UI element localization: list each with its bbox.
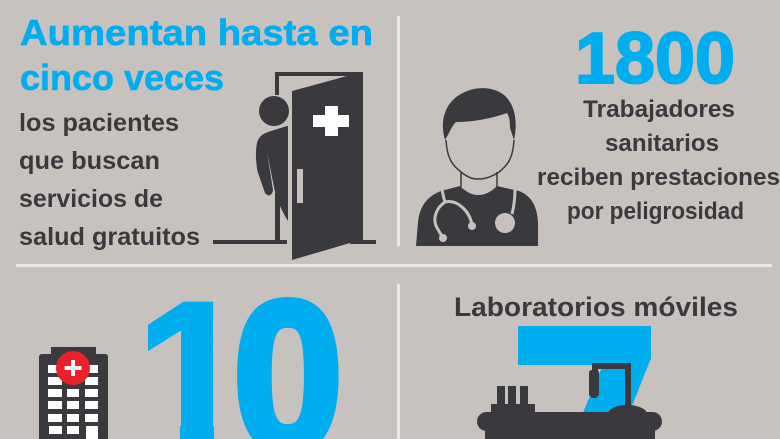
text: health workers hazard pay: reciben prestaciones [537, 164, 780, 191]
text: patients seeking free care: los pacientes [19, 109, 179, 137]
icon: doctor with stethoscope [416, 88, 538, 246]
panel: mobile labs [454, 282, 738, 439]
text: patients seeking free care: salud gratuitos [19, 223, 200, 251]
heading: mobile laboratories: Laboratorios móviles [454, 292, 738, 322]
heading: five times: Aumentan hasta en [20, 12, 373, 53]
text: health workers hazard pay: Trabajadores [583, 96, 735, 123]
text: patients seeking free care: que buscan [19, 147, 160, 175]
heading: five times [20, 12, 373, 98]
icon: person at clinic door [213, 72, 376, 260]
heading: five times: cinco veces [20, 57, 224, 98]
text: patients seeking free care [19, 109, 200, 251]
text: health workers hazard pay: sanitarios [605, 130, 719, 157]
panel: health workers [416, 19, 780, 246]
text: health workers hazard pay: por peligrosidad [567, 198, 744, 225]
icon: laboratory bench [477, 363, 662, 439]
icon: hospital building [39, 347, 108, 439]
panel: hospitals [39, 297, 339, 439]
text: health workers hazard pay [537, 96, 780, 225]
panel: patients [19, 12, 376, 260]
text: patients seeking free care: servicios de [19, 185, 163, 213]
number: 10 [148, 297, 339, 439]
number: 1800: 1800 [575, 19, 735, 99]
